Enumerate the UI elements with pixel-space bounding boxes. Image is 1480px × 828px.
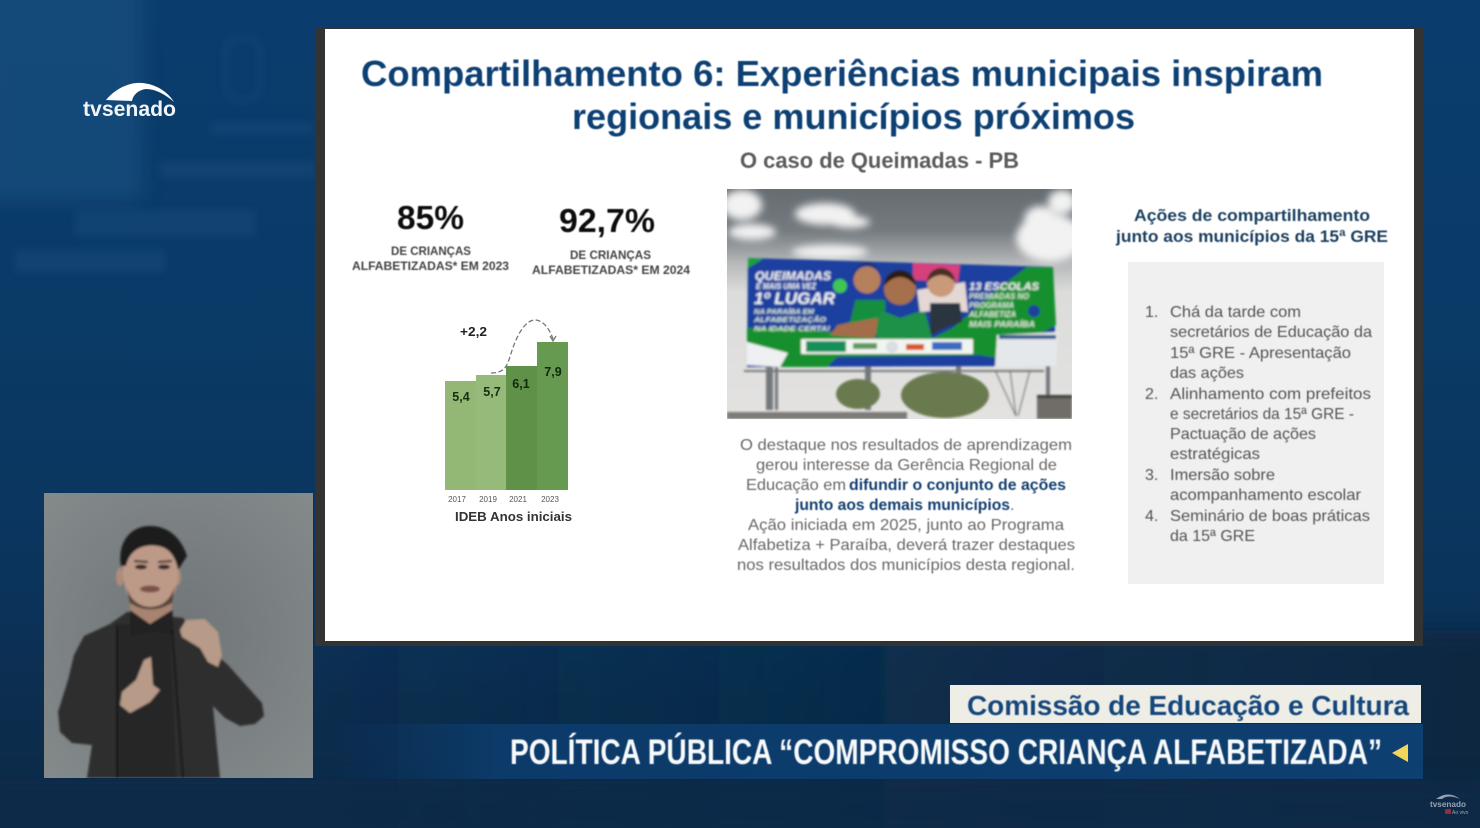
interpreter neck and face (128, 602, 174, 626)
bar 2021 (506, 366, 537, 504)
billboard children (830, 263, 968, 338)
stat: 85% in 2023: 85% (397, 199, 464, 236)
bar 2019: 2019 (479, 495, 497, 504)
billboard text: 1º LUGAR (754, 289, 836, 308)
bar 2023: 7,9 (544, 365, 562, 379)
text block: description: gerou interesse da Gerência Regional de (756, 457, 1057, 474)
panel: numbered actions list: acompanhamento escolar (1170, 487, 1362, 504)
heading: sharing actions (1115, 206, 1388, 246)
text block: description: Alfabetiza + Paraíba, deverá trazer destaques (738, 537, 1075, 554)
panel: numbered actions list: das ações (1170, 365, 1244, 382)
interpreter hands (180, 619, 222, 667)
title: regionais e municípios próximos (572, 96, 1135, 137)
billboard supports (744, 366, 1050, 416)
panel: numbered actions list: 2. (1145, 386, 1158, 403)
billboard text: NA IDADE CERTA! (754, 324, 831, 333)
growth label: +2,2 (460, 325, 487, 339)
panel: numbered actions list: 4. (1145, 508, 1158, 525)
interpreter hair (120, 526, 187, 570)
bar 2021: 2021 (509, 495, 527, 504)
logo: small tvsenado watermark: tvsenado (1430, 800, 1466, 809)
text block: description: difundir o conjunto de ações (849, 477, 1066, 494)
stat: 85% in 2023: DE CRIANÇAS (391, 244, 471, 258)
lower third: commission label: Comissão de Educação e Cultura (967, 690, 1409, 721)
panel: sign language interpreter (44, 493, 313, 778)
text block: description: nos resultados dos municípios desta regional. (737, 557, 1075, 574)
logo: tvsenado (83, 83, 176, 121)
stat: 92,7% in 2024 (532, 202, 690, 277)
panel: numbered actions list (1128, 262, 1384, 584)
text block: description: Ação iniciada em 2025, junto ao Programa (748, 517, 1064, 534)
panel: numbered actions list: estratégicas (1170, 446, 1260, 463)
bar chart: IDEB Anos iniciais (445, 320, 572, 524)
billboard text: É MAIS UMA VEZ (756, 282, 817, 291)
stat: 92,7% in 2024: 92,7% (559, 202, 655, 239)
stat: 92,7% in 2024: DE CRIANÇAS (570, 248, 651, 262)
billboard text (753, 269, 1040, 333)
panel: numbered actions list: 15ª GRE - Apresentação (1170, 345, 1351, 362)
panel: numbered actions list: Seminário de boas práticas (1170, 508, 1370, 525)
billboard base (747, 258, 1056, 367)
title: Compartilhamento 6: Experiências municipais inspiram (361, 53, 1323, 94)
logo: tvsenado: tvsenado (83, 98, 176, 121)
trees (836, 372, 989, 418)
panel: numbered actions list: Pactuação de ações (1170, 426, 1316, 443)
logo: small tvsenado watermark (1430, 794, 1469, 816)
text block: description: . (1010, 497, 1014, 514)
text block: description: Educação em (746, 477, 846, 494)
billboard text: PROGRAMA (969, 301, 1014, 310)
billboard text: MAIS PARAÍBA (969, 320, 1035, 329)
bar 2021: 6,1 (512, 377, 530, 391)
stat: 92,7% in 2024: ALFABETIZADAS* EM 2024 (532, 263, 690, 277)
arrow: dashed growth curve (491, 320, 556, 373)
panel: numbered actions list: secretários de Educação da (1170, 324, 1372, 341)
lower third: policy title bar (317, 724, 1423, 779)
billboard white wedge (747, 342, 788, 367)
heading: sharing actions: Ações de compartilhamento (1134, 206, 1370, 225)
bar 2017: 5,4 (452, 390, 470, 404)
bar 2019: 5,7 (483, 385, 501, 399)
billboard text: ALFABETIZAÇÃO (753, 315, 826, 324)
bar 2019 (476, 375, 506, 504)
interpreter body (58, 612, 264, 778)
logo: small tvsenado watermark: Ao vivo (1452, 810, 1469, 816)
subtitle: O caso de Queimadas - PB (740, 148, 1019, 173)
billboard side panel (995, 332, 1058, 367)
heading: sharing actions: junto aos municípios da 15ª GRE (1115, 227, 1388, 246)
bar 2023 (537, 342, 568, 504)
chart caption: IDEB Anos iniciais (455, 509, 572, 524)
text block: description: O destaque nos resultados de aprendizagem (740, 437, 1072, 454)
billboard text: PREMIADAS NO (969, 292, 1030, 301)
stat: 85% in 2023: ALFABETIZADAS* EM 2023 (352, 259, 509, 273)
photo: Queimadas billboard (722, 189, 1084, 419)
panel: numbered actions list: e secretários da 15ª GRE - (1170, 406, 1354, 423)
billboard text: 13 ESCOLAS (969, 281, 1040, 293)
bar 2023: 2023 (541, 495, 559, 504)
panel: presentation slide (315, 27, 1423, 646)
panel: numbered actions list: Alinhamento com prefeitos (1170, 386, 1371, 403)
icon: yellow triangle (1392, 744, 1408, 762)
billboard text: QUEIMADAS (755, 269, 831, 283)
text block: description: junto aos demais municípios (794, 497, 1010, 514)
panel: numbered actions list: da 15ª GRE (1170, 528, 1255, 545)
bar 2017 (445, 381, 476, 504)
panel: numbered actions list: Imersão sobre (1170, 467, 1275, 484)
title (361, 53, 1323, 137)
stat: 85% in 2023 (352, 199, 509, 273)
text block: description (737, 437, 1075, 574)
billboard text: ALFABETIZA (968, 310, 1016, 319)
panel: numbered actions list: Chá da tarde com (1170, 304, 1301, 321)
ground and wall (727, 412, 907, 419)
panel: numbered actions list: 1. (1145, 304, 1158, 321)
billboard white strip (801, 339, 973, 354)
bar 2017: 2017 (448, 495, 466, 504)
billboard text: NA PARAÍBA EM (754, 307, 815, 316)
panel: numbered actions list: 3. (1145, 467, 1158, 484)
